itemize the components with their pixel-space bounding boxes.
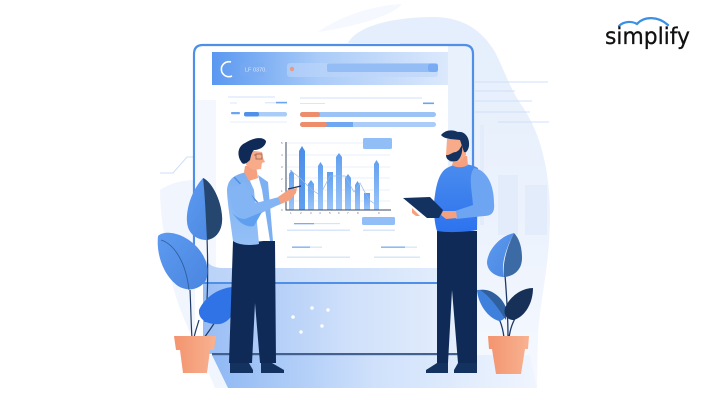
face: [246, 150, 265, 170]
hands: [412, 208, 420, 216]
tablet: [403, 197, 443, 218]
right person: [403, 130, 494, 373]
mid-left leaf: [158, 233, 208, 289]
header label: LF 0370.: [245, 68, 267, 74]
glasses: [254, 154, 262, 159]
bar chart: [281, 141, 391, 215]
low-right leaf: [199, 287, 233, 324]
chart button bottom: [362, 217, 395, 225]
arm: [229, 182, 281, 219]
neck: [452, 156, 468, 167]
jacket: [227, 172, 259, 245]
sparkline left: [160, 147, 211, 173]
decorative lines right: [475, 82, 549, 122]
bar chart: 3: [310, 211, 312, 215]
pale blob left: [160, 180, 228, 388]
hand: [278, 188, 297, 204]
bar chart: 7: [347, 211, 349, 215]
bar chart: 9: [378, 211, 380, 215]
beard: [446, 145, 462, 161]
bar chart: 2: [281, 177, 283, 181]
background blob: [348, 17, 550, 388]
pale top swoosh: [318, 4, 402, 32]
header label: [240, 63, 267, 76]
left person: [227, 138, 301, 373]
hair: [441, 130, 469, 152]
sleeve: [455, 168, 494, 219]
stats block left: [228, 96, 287, 122]
text lines: [287, 223, 420, 258]
gauge icon: [221, 62, 232, 77]
flower pot: [488, 336, 529, 374]
logo cloud arc: [619, 18, 668, 26]
monitor frame: [194, 45, 473, 283]
bar chart: 4: [319, 211, 321, 215]
bar chart: 6: [338, 211, 340, 215]
bar chart: 8: [357, 211, 359, 215]
right plant: [477, 233, 533, 374]
wall below screen: [196, 100, 216, 283]
left plant: [158, 178, 233, 373]
screen panel: [212, 52, 448, 268]
flower pot: [174, 336, 216, 373]
left leaf: [477, 290, 506, 321]
bar chart: 2: [300, 211, 302, 215]
trousers: [229, 241, 276, 363]
shoes: [230, 363, 253, 373]
floor area: [203, 282, 537, 388]
search bar: [287, 63, 438, 77]
background building shapes: [480, 125, 547, 235]
bar chart: 5: [281, 141, 283, 145]
bar chart: 3: [281, 165, 283, 169]
bar chart: 1: [281, 189, 283, 193]
sweater: [434, 164, 478, 232]
white shirt: [250, 176, 273, 242]
bar chart: 0: [281, 208, 283, 212]
shoes: [426, 363, 448, 373]
bar chart: 4: [281, 153, 283, 157]
screen header: [212, 52, 448, 85]
face: [446, 139, 466, 162]
top leaf: [487, 233, 514, 277]
right leaf: [505, 288, 533, 320]
trousers: [437, 231, 477, 363]
chart button top: [363, 138, 392, 149]
bar chart: 5: [329, 211, 331, 215]
stats block right: [300, 98, 436, 127]
bar chart: 1: [290, 211, 292, 215]
top leaf: [187, 178, 222, 240]
neck: [244, 166, 258, 181]
hair: [238, 138, 266, 164]
sparkle dots: [291, 306, 330, 334]
logo: simplify: simplify: [605, 24, 690, 50]
